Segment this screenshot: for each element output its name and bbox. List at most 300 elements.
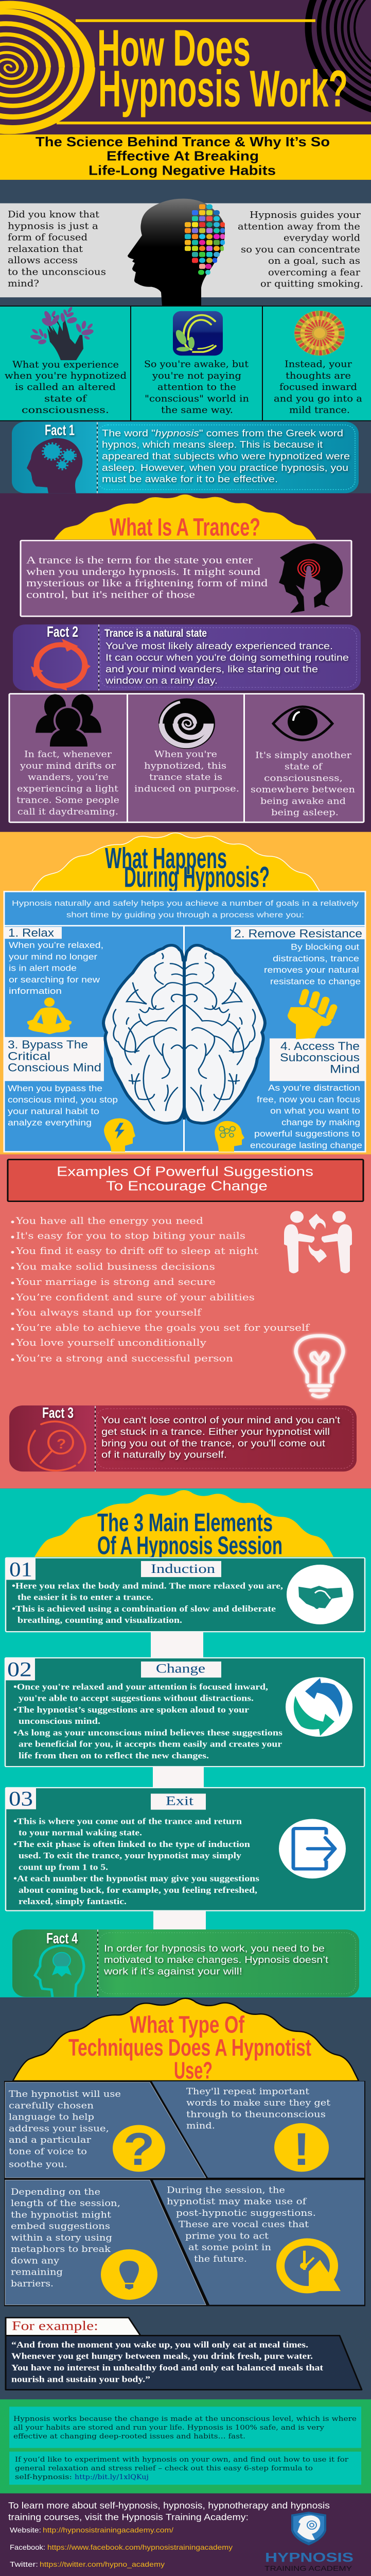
burst and heading: what is a trance — [54, 495, 316, 541]
text: column 3: somewhere between — [251, 785, 355, 795]
text: fact 1: asleep. However, when you practice hypnosis, you — [102, 463, 348, 473]
section background: techniques — [0, 1997, 371, 2399]
text: induction: the easier it is to enter a trance. — [17, 1592, 153, 1602]
text: column 2: the same way. — [161, 405, 233, 415]
panel: self-hypnosis box: If you’d like to experiment with hypnosis on your own, and find out how to use it for — [15, 2456, 348, 2464]
section background: suggestions — [0, 1155, 371, 1488]
panel: intro — [8, 199, 363, 306]
icon: two people exchanging — [284, 1211, 352, 1273]
technique panel 4: prime you to act — [185, 2231, 269, 2241]
text: column 3: being asleep. — [271, 808, 339, 818]
list: suggestions: You’re confident and sure of your abilities — [15, 1292, 255, 1303]
panel: self-hypnosis box: http://bit.ly/1xlQKuj — [75, 2473, 149, 2481]
technique panel 3: remaining — [11, 2267, 63, 2277]
text block: intro left: form of focused — [8, 232, 87, 243]
technique panel 1: soothe you. — [9, 2159, 67, 2170]
technique panel 1: address your issue, — [9, 2124, 109, 2134]
text block: intro right — [238, 210, 363, 289]
text: column 3: state of — [285, 762, 323, 772]
text block: intro left: Did you know that — [8, 209, 99, 220]
heading panel: examples of suggestions: Examples Of Powerful Suggestions — [57, 1164, 313, 1179]
icon: head with lightning — [104, 1118, 135, 1151]
list: suggestions: You find it easy to drift off to sleep at night — [15, 1246, 258, 1257]
technique panel 3: Depending on the — [11, 2187, 100, 2197]
panel: conclusion box: effective at changing deep-rooted issues and habits… fast. — [13, 2433, 245, 2441]
number: 02: 02 — [7, 1658, 32, 1681]
label: step 3: Critical — [8, 1050, 50, 1063]
icon: handshake — [287, 1565, 354, 1624]
section background: intro dark — [0, 180, 371, 307]
subtitle: Life-Long Negative Habits — [89, 163, 276, 178]
technique panel 1: The hypnotist will use — [9, 2089, 121, 2099]
label: step 4: 4. Access The — [280, 1040, 360, 1053]
technique panel 4 — [153, 2180, 364, 2305]
text: step 4: encourage lasting change — [250, 1140, 362, 1150]
text: step 4: As you’re distraction — [268, 1083, 360, 1093]
heading: fact 1: Fact 1 — [45, 422, 75, 438]
panel: self-hypnosis box: self-hypnosis: — [15, 2473, 72, 2481]
text: step 4 — [250, 1083, 362, 1150]
list: suggestions: You always stand up for yourself — [15, 1307, 202, 1318]
text: column 2: trance state is — [149, 772, 222, 783]
panel: conclusion box: Hypnosis works because the change is made at the unconscious level, which is where — [13, 2415, 357, 2423]
label: step 4: Subconscious — [280, 1052, 360, 1064]
burst and heading: what type of techniques: Use? — [174, 2057, 213, 2084]
text: step 3: conscious mind, you stop — [8, 1095, 118, 1105]
icon: head with cogs — [27, 438, 82, 493]
title — [97, 19, 348, 117]
text block: intro right: overcoming a fear — [268, 267, 361, 278]
technique panel 1: carefully chosen — [9, 2100, 94, 2111]
text: step 3 — [8, 1083, 118, 1127]
icon: magnifier with question mark: ? — [57, 1436, 66, 1452]
technique panel 2: They'll repeat important — [186, 2087, 310, 2097]
text: step 4: powerful suggestions to — [254, 1129, 360, 1139]
text: column 1: trance. Some people — [16, 795, 119, 805]
text: column 3: consciousness, — [264, 773, 343, 784]
technique panel 3: embed suggestions — [11, 2222, 110, 2231]
footer text: http://hypnosistrainingacademy.com/ — [43, 2526, 174, 2534]
heading: induction: Induction — [151, 1562, 215, 1576]
text: exit: •At each number the hypnotist may give you suggestions — [13, 1874, 259, 1883]
text: step 1: or searching for new — [9, 975, 100, 985]
text: trance definition — [26, 554, 268, 600]
text: step 1: information — [9, 986, 62, 996]
icon: eye — [273, 707, 332, 740]
text: column 1: call it daydreaming. — [17, 807, 118, 817]
list: suggestions: It's easy for you to stop biting your nails — [16, 1231, 245, 1241]
text block: intro right: or quitting smoking. — [260, 279, 363, 289]
heading: fact 3: Fact 3 — [42, 1405, 74, 1421]
technique panel 2: through to theunconscious — [186, 2109, 326, 2120]
rule: top yellow line — [76, 19, 315, 22]
technique panel 4: These are vocal cues that — [179, 2219, 309, 2230]
subtitle: The Science Behind Trance & Why It’s So — [36, 134, 330, 149]
icon: black spiral top right — [308, 0, 371, 115]
icon: circular arrows — [31, 639, 91, 690]
quote panel: “And from the moment you wake up, you will only eat at meal times. — [11, 2340, 308, 2349]
text: fact 3: of it naturally by yourself. — [101, 1450, 227, 1460]
technique panel 1: language to help — [9, 2112, 94, 2122]
text: fact 3: bring you out of the trance, or you'll come out — [101, 1438, 326, 1449]
label: step 2: 2. Remove Resistance — [234, 928, 362, 940]
heading: exit: Exit — [166, 1793, 194, 1808]
rule: bottom yellow line — [57, 122, 371, 124]
text: exit: relaxed, simply fantastic. — [19, 1896, 127, 1906]
burst and heading: what is a trance: What Is A Trance? — [110, 513, 260, 541]
logo: hypnosis training academy: TRAINING ACADEMY — [264, 2565, 352, 2573]
number: 01: 01 — [9, 1558, 32, 1581]
number: 03: 03 — [9, 1788, 33, 1810]
text: fact 2: Trance is a natural state — [104, 626, 207, 639]
text: step 3: analyze everything — [8, 1118, 92, 1127]
heading panel: examples of suggestions — [8, 1160, 363, 1201]
icon: refresh arrows — [286, 1677, 352, 1737]
text: fact 1: hypnos, which means sleep. This is because it — [102, 439, 323, 450]
text block: intro right: Hypnosis guides your — [250, 210, 361, 221]
burst and heading: what happens during hypnosis: What Happens — [105, 841, 227, 874]
text: column 1: What you experience — [12, 359, 119, 370]
text: step 3: your natural habit to — [8, 1106, 99, 1116]
section background: conclusion — [0, 2399, 371, 2494]
technique panel 1 — [5, 2082, 206, 2178]
panel: element 03 exit — [6, 1788, 365, 1911]
panel: process with brain — [4, 891, 365, 1151]
technique panel 3: length of the session, — [11, 2198, 120, 2209]
text: column 3: focused inward — [279, 382, 357, 393]
connector: 02 to 03 — [153, 1767, 204, 1787]
text: step 4: change by making — [281, 1117, 360, 1127]
text: fact 1: The word "hypnosis" comes from the Greek word — [102, 428, 343, 439]
label: step 4: Mind — [330, 1063, 360, 1076]
heading: change — [141, 1661, 221, 1677]
text: column 3: Instead, your — [285, 359, 352, 369]
heading: change: Change — [156, 1661, 205, 1675]
section background: trance — [0, 493, 371, 832]
text: fact 3: You can't lose control of your mind and you can't — [101, 1415, 341, 1426]
section background: footer — [0, 2494, 371, 2576]
footer text: To learn more about self-hypnosis, hypnosis, hypnotherapy and hypnosis — [8, 2501, 330, 2511]
text: step 3: When you bypass the — [8, 1083, 102, 1093]
text block: intro left: relaxation that — [8, 244, 83, 255]
text: process intro: short time by guiding you through a process where you: — [66, 910, 304, 919]
text: column 3: thoughts are — [286, 370, 351, 381]
text: step 4: free, now you can focus — [257, 1094, 360, 1104]
panel: self-hypnosis box: general relaxation and stress relief – check out this easy 6-step formula to — [15, 2465, 313, 2472]
footer text: Facebook: — [10, 2544, 45, 2552]
panel: conclusion box: all your habits are stored and run your life. Hypnosis is 100% safe, and is very — [13, 2424, 324, 2432]
icon: bulb badge — [101, 2249, 157, 2300]
technique panel 2: mind. — [186, 2121, 215, 2131]
label: step 3 — [4, 1037, 104, 1081]
text: column 1: consciousness. — [22, 405, 109, 415]
technique panel 4: the future. — [194, 2254, 247, 2264]
technique panel 4: hypnotist may make use of — [167, 2197, 307, 2207]
text: change: you're able to accept suggestions without distractions. — [19, 1693, 254, 1703]
list: suggestions: You’re a strong and successful person — [15, 1353, 233, 1364]
heading: exit — [151, 1793, 206, 1810]
icon: clock arrow — [280, 2242, 341, 2291]
text: fact 2: You've most likely already experienced trance. — [105, 641, 333, 652]
footer text: Twitter: — [10, 2561, 38, 2569]
heading: fact 4: Fact 4 — [46, 1930, 78, 1946]
text: fact 1 — [102, 428, 350, 485]
technique panel 1: and a particular — [9, 2135, 91, 2145]
text: step 2 — [264, 942, 361, 986]
text: column 1: your mind drifts or — [20, 761, 116, 771]
section background: intro grey band — [0, 204, 371, 297]
list: suggestions: You have all the energy you need — [15, 1215, 203, 1226]
list: suggestions — [11, 1215, 310, 1364]
footer text: Website: — [10, 2526, 41, 2534]
text: fact 3 — [101, 1415, 341, 1460]
panel: fact 1 — [12, 421, 359, 493]
text: fact 3: get stuck in a trance. Either your hypnotist will — [101, 1427, 330, 1437]
section background: elements — [0, 1488, 371, 1997]
text: exit: used. To exit the trance, your hypnotist may simply — [19, 1851, 242, 1860]
panel: self-hypnosis box — [9, 2452, 361, 2485]
section background: header — [0, 0, 371, 134]
heading: induction — [141, 1561, 221, 1577]
text: column 1 — [16, 749, 119, 817]
text: column 1: In fact, whenever — [24, 749, 112, 759]
list: suggestions: You’re able to achieve the goals you set for yourself — [15, 1323, 310, 1333]
burst and heading: three main elements: The 3 Main Elements — [97, 1509, 273, 1537]
icon: question mark: ? — [123, 2124, 155, 2175]
technique panel 3: barriers. — [11, 2279, 54, 2289]
panel: techniques grid — [4, 2081, 365, 2306]
panel: fact 3 — [9, 1405, 357, 1471]
text: change: life from then on to reflect the new changes. — [19, 1751, 209, 1760]
label: step 4 — [270, 1038, 365, 1081]
label: step 3: 3. Bypass The — [8, 1039, 88, 1052]
text: step 2: resistance to change — [270, 976, 361, 986]
heading: fact 2: Fact 2 — [47, 624, 78, 640]
text: induction — [12, 1581, 283, 1625]
text: trance definition: control, but it's neither of those — [26, 589, 195, 600]
text: column 2 — [144, 359, 249, 415]
technique panel 2: words to make sure they get — [186, 2098, 331, 2108]
title: How Does — [97, 19, 251, 77]
text: column 2: induced on purpose. — [134, 784, 239, 794]
text: fact 4 — [103, 1943, 329, 1977]
panel: element 02 change — [5, 1658, 364, 1767]
icon: mandala — [294, 311, 345, 355]
technique panel 4: at some point in — [188, 2243, 271, 2252]
text: step 1: your mind no longer — [9, 952, 97, 961]
connector: 01 to 02 — [151, 1632, 203, 1657]
text: change: unconscious mind. — [19, 1716, 100, 1726]
footer text: training courses, visit the Hypnosis Training Academy: — [8, 2512, 249, 2522]
text: column 2: "conscious" world in — [145, 393, 249, 404]
section background: fact 1 — [0, 421, 371, 493]
illustration: brain — [103, 945, 265, 1123]
text: trance definition: when you undergo hypnosis. It might sound — [26, 566, 260, 578]
text: exit: to your normal waking state. — [19, 1827, 142, 1837]
text: fact 4: motivated to make changes. Hypnosis doesn’t — [104, 1955, 329, 1965]
burst and heading: what type of techniques — [13, 1998, 359, 2084]
text: induction: breathing, counting and visualization. — [17, 1615, 182, 1625]
text block: intro left — [8, 209, 106, 289]
footer text — [8, 2501, 330, 2569]
technique panel 2 — [152, 2081, 364, 2178]
text: exit: about coming back, for example, you feeling refreshed, — [19, 1885, 257, 1895]
technique panel 4: During the session, the — [167, 2185, 285, 2195]
icon: head with medal — [35, 1945, 84, 1997]
text: change: •Once you're relaxed and your attention is focused inward, — [13, 1682, 268, 1691]
technique panel 3: down any — [11, 2256, 60, 2266]
text: exit: •The exit phase is often linked to the type of induction — [13, 1839, 250, 1849]
icon: head with finger and target — [279, 544, 343, 614]
text: fact 2 — [104, 626, 349, 686]
text: column 3 — [251, 750, 355, 818]
section background: subtitle band — [0, 134, 371, 180]
text: step 1 — [9, 940, 103, 996]
text: exit: count up from 1 to 5. — [19, 1862, 108, 1872]
label: step 3: Conscious Mind — [8, 1062, 101, 1074]
icon: question mark — [113, 2124, 165, 2175]
footer text: https://www.facebook.com/hypnosistrainingacademy — [47, 2544, 233, 2552]
technique panel 3: the hypnotist might — [11, 2210, 112, 2220]
footer text: https://twitter.com/hypno_academy — [40, 2561, 165, 2569]
panel: conclusion box — [9, 2406, 361, 2448]
text block: intro left: allows access — [8, 255, 78, 266]
text: column 1: state of — [44, 393, 87, 404]
quote panel: nourish and sustain your body.” — [11, 2374, 150, 2384]
text: change — [13, 1682, 282, 1760]
text block: intro left: to the unconscious — [8, 266, 106, 277]
list: suggestions: You love yourself unconditionally — [15, 1337, 206, 1348]
list: suggestions: Your marriage is strong and secure — [15, 1277, 216, 1287]
callout: for example — [6, 2318, 362, 2389]
text: column 2: attention to the — [157, 382, 236, 393]
text: column 3: being awake and — [260, 796, 346, 806]
text block: intro right: attention away from the — [238, 221, 360, 232]
burst and heading: what type of techniques: What Type Of — [130, 2011, 244, 2038]
panel: fact 4 — [12, 1929, 359, 1997]
text: fact 1: must be awake for it to be effective. — [102, 474, 278, 485]
text: step 4: on what you want to — [270, 1106, 360, 1115]
text: column 3: mild trance. — [289, 405, 350, 415]
icon: head silhouette with colourful brain — [128, 199, 225, 306]
icon: light bulb — [296, 1336, 343, 1397]
text: column 3: and you go into a — [274, 393, 362, 404]
text: column 1: wanders, you’re — [28, 772, 109, 783]
quote panel: You have no interest in unhealthy food and only eat balanced meals that — [11, 2363, 324, 2372]
text block: intro left: hypnosis is just a — [8, 221, 98, 231]
icon: meditation figure — [27, 997, 72, 1034]
panel: element 01 induction — [6, 1558, 365, 1632]
text: column 1: experiencing a light — [17, 784, 119, 794]
technique panel 3 — [5, 2180, 206, 2305]
panel: fact 2 — [13, 624, 361, 690]
panel: three trance columns — [9, 694, 364, 822]
list: suggestions: You make solid business decisions — [15, 1261, 215, 1272]
text: step 2: removes your natural — [264, 965, 359, 975]
icon: head with cogs small — [215, 1121, 244, 1151]
text: column 2: you're not paying — [152, 370, 241, 381]
text: column 1: is called an altered — [15, 382, 116, 393]
burst and heading: what happens during hypnosis — [32, 833, 320, 893]
text: process intro — [12, 899, 359, 919]
text: fact 1: appeared that subjects who were hypnotized were — [102, 451, 350, 462]
icon: exit door — [279, 1819, 346, 1878]
section background: teal columns — [0, 306, 371, 421]
text: fact 2: and your mind wanders, like staring out the — [105, 664, 318, 674]
text: step 2: By blocking out — [291, 942, 359, 952]
icon: exclamation mark: ! — [293, 2124, 310, 2175]
text: column 1 — [5, 359, 127, 415]
icon: raised fist — [288, 988, 338, 1039]
text: column 2 — [134, 749, 239, 794]
text: induction: •Here you relax the body and mind. The more relaxed you are, — [12, 1581, 283, 1590]
technique panel 4: post-hypnotic suggestions. — [176, 2208, 316, 2218]
text: column 2: So you're awake, but — [144, 359, 249, 369]
icon: C leaf logo — [173, 311, 223, 355]
text: column 1: when you're hypnotized — [5, 370, 127, 381]
text block: intro right: on a goal, such as — [268, 256, 360, 266]
text: column 2: hypnotized, this — [144, 761, 226, 771]
wordmark: HYPNOSIS — [265, 2550, 354, 2565]
section background: what happens — [0, 832, 371, 1155]
text: step 2: distractions, trance — [273, 954, 359, 963]
subtitle — [36, 134, 330, 178]
text: induction: •This is achieved using a combination of slow and deliberate — [12, 1604, 276, 1614]
technique panel 3: within a story using — [11, 2233, 112, 2243]
frame lines — [0, 306, 371, 421]
text block: intro right: everyday world — [284, 233, 360, 243]
icon: hand with leaves — [30, 306, 94, 360]
text: change: are beneficial for you, it accepts them easily and creates your — [19, 1739, 282, 1749]
text: exit: •This is where you come out of the trance and return — [13, 1816, 242, 1826]
quote panel — [6, 2335, 362, 2389]
connector: 03 to fact 4 — [153, 1911, 206, 1929]
text: trance definition: A trance is the term for the state you enter — [26, 554, 253, 566]
panel: trance definition — [21, 540, 351, 616]
icon: yellow spiral left — [0, 5, 91, 130]
icon: magnifier with question mark — [29, 1421, 85, 1470]
panel: three teal columns — [0, 306, 371, 421]
text: fact 4: work if it’s against your will! — [103, 1966, 242, 1977]
technique panel 3: metaphors to break — [11, 2244, 111, 2255]
text: step 1: When you’re relaxed, — [9, 940, 103, 950]
text: change: •The hypnotist’s suggestions are spoken aloud to your — [13, 1705, 249, 1715]
header — [0, 0, 371, 130]
text block: intro right: so you can concentrate — [241, 244, 360, 255]
tab: for example — [6, 2318, 140, 2335]
technique panel 1: tone of voice to — [9, 2146, 87, 2157]
quote panel: Whenever you get hungry between meals, you drink fresh, pure water. — [11, 2351, 313, 2361]
text: trance definition: mysterious or like a frightening form of mind — [26, 577, 268, 589]
text: column 3: It's simply another — [255, 750, 351, 760]
tab: for example: For example: — [12, 2318, 98, 2333]
text: change: •As long as your unconscious mind believes these suggestions — [13, 1727, 282, 1737]
subtitle: Effective At Breaking — [107, 148, 259, 163]
burst and heading: three main elements — [34, 1490, 333, 1560]
icon: hypnotic spiral — [158, 699, 215, 749]
text block: intro left: mind? — [8, 278, 39, 289]
icon: exclamation mark — [274, 2123, 329, 2175]
text: step 1: is in alert mode — [9, 963, 77, 973]
label: step 1: 1. Relax — [8, 927, 54, 939]
heading panel: examples of suggestions: To Encourage Change — [106, 1178, 268, 1193]
logo: hypnosis training academy — [264, 2512, 354, 2573]
text: fact 2: window on a rainy day. — [105, 675, 218, 686]
text: fact 4: In order for hypnosis to work, you need to be — [104, 1943, 325, 1954]
text: fact 2: It can occur when you're doing something routine — [105, 653, 349, 663]
text: exit — [13, 1816, 259, 1906]
text: process intro: Hypnosis naturally and safely helps you achieve a number of goals in a relatively — [12, 899, 359, 908]
